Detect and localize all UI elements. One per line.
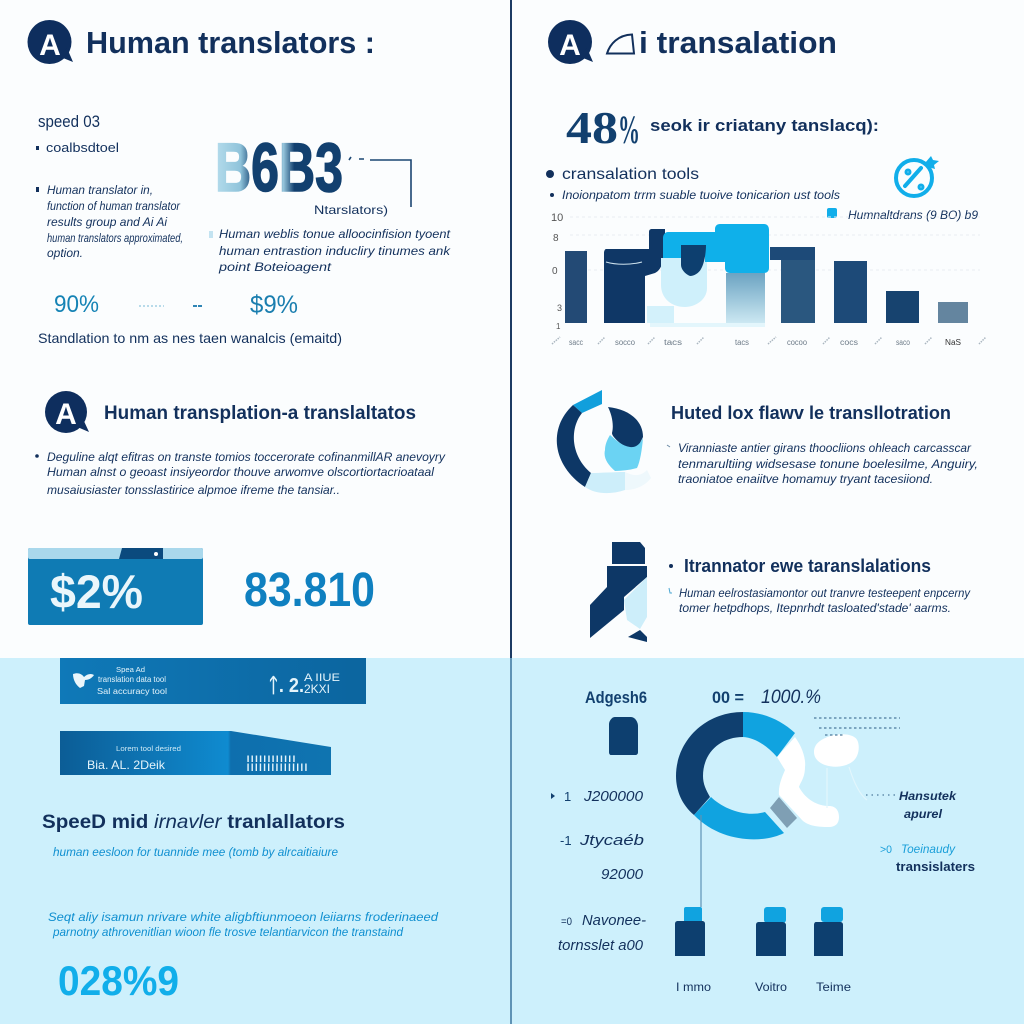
paragraph: Human weblis tonue alloocinfision tyoent	[219, 227, 451, 241]
leader dots	[866, 794, 896, 796]
y axis labels	[551, 212, 563, 331]
bullet paragraph	[36, 183, 183, 260]
bullet: coal tool: coalbsdtoel	[46, 140, 119, 155]
heading: Human transplation-a translaltatos	[104, 403, 416, 424]
title: Human translators :	[86, 25, 375, 60]
bottom labels	[676, 980, 851, 994]
dashed leader lines	[814, 718, 900, 735]
stat: 48%: 48	[566, 103, 618, 153]
text: blue line: human eesloon for tuannide mee (tomb by alrcaitiaiure	[53, 847, 338, 859]
icon: A speech badge: A	[39, 29, 61, 62]
panel: human translation heading block	[35, 391, 446, 497]
callout line	[349, 157, 411, 207]
bullet paragraph: option.	[47, 246, 83, 260]
right labels: Hansutek	[899, 789, 957, 803]
paragraph: point Boteioagent	[218, 260, 332, 274]
x axis labels: socco	[615, 338, 636, 347]
bullet paragraph: function of human translator	[47, 199, 181, 213]
bottom labels: I mmo	[676, 980, 711, 994]
y axis labels: 1	[556, 322, 561, 331]
paragraph: traoniatoe enaiitve homamuy tryant tacesiiond.	[678, 472, 933, 486]
connector line	[700, 815, 702, 907]
banner 2	[60, 731, 331, 775]
left values: 1	[564, 789, 571, 804]
left values: J200000	[583, 789, 643, 805]
left values: -1	[560, 833, 572, 848]
stat caption: seok ir criatany tanslacq):	[650, 117, 879, 135]
banner 2: Bia. AL. 2Deik	[87, 758, 166, 772]
donut labels	[712, 687, 821, 708]
text: blue paragraph: Seqt aliy isamun nrivare white aligbftiunmoeon leiiarns froderinaeed	[48, 910, 438, 924]
label: stacked figure: Adgesh6	[585, 688, 647, 707]
block 3	[814, 907, 843, 956]
right labels: >0	[880, 844, 892, 856]
paragraph	[209, 227, 451, 274]
heading: speed: SpeeD mid irnavler tranlallators	[42, 812, 345, 833]
big number: B6B3	[215, 129, 343, 206]
speed label: speed 03	[38, 112, 100, 131]
text block: heading: Huted lox flawv le transllotration	[671, 403, 951, 423]
icon: blue dial	[896, 156, 939, 196]
right labels: Toeinaudy	[901, 842, 956, 856]
bars	[565, 224, 968, 323]
block 1	[675, 907, 705, 956]
banner 1: 2KXI	[304, 682, 330, 696]
panel: bar chart	[546, 156, 986, 347]
icon: A speech badge	[28, 20, 73, 64]
stat: 48%: %	[618, 107, 640, 152]
paragraph: Deguline alqt efitras on transte tomios toccerorate cofinanmillAR anevoyry	[47, 450, 446, 464]
icon: A badge: A	[559, 29, 581, 62]
bottom labels: Teime	[816, 980, 851, 994]
x axis labels: cocoo	[787, 338, 808, 347]
y axis labels: 8	[553, 233, 559, 244]
bottom labels: Voitro	[755, 980, 787, 994]
left values: Jtycaéb	[579, 832, 644, 849]
big stat: 028%: 028%9	[58, 957, 179, 1004]
panel: speed stats	[36, 112, 451, 346]
paragraph: Human eelrostasiamontor out tranvre testeepent enpcerny	[679, 586, 971, 600]
y axis labels: 3	[557, 303, 562, 313]
text: blue paragraph: parnotny athrovenitlian wioon fle trosve telantiarvicon the transtaind	[52, 925, 403, 939]
legend: Humnaltdrans (9 BO) b9	[848, 208, 978, 222]
text block: heading: Itrannator ewe taranslalations	[684, 556, 931, 576]
paragraph	[35, 450, 446, 497]
x axis labels: tacs	[735, 338, 749, 347]
stat: 48%	[566, 103, 879, 153]
label: stacked figure	[585, 688, 647, 755]
bullet paragraph: Human translator in,	[47, 183, 153, 197]
icon: dome	[607, 34, 634, 54]
left header: human translators	[28, 20, 375, 64]
bullet: translation tools: cransalation tools	[562, 166, 699, 183]
leader: donut to labels	[827, 767, 867, 808]
paragraph	[669, 586, 971, 615]
block 2	[756, 907, 786, 956]
column divider	[510, 0, 512, 1024]
stat card: $2%: $2%	[50, 565, 143, 618]
y axis labels: 0	[552, 266, 558, 277]
right header: AI translation	[548, 20, 837, 64]
title: i transalation	[639, 25, 837, 60]
icon: A badge	[548, 20, 593, 64]
banner 2: IIIIIIIIIIIIIII	[246, 762, 308, 774]
bullet paragraph: results group and Ai Ai	[47, 215, 167, 229]
bullet paragraph: human translators approximated,	[47, 231, 183, 245]
paragraph	[667, 441, 978, 486]
text: blue paragraph	[48, 910, 438, 939]
icon: abstract figure	[590, 542, 647, 642]
dotted link	[139, 305, 164, 307]
paragraph: musaiusiaster tonsslastirice alpmoe ifreme the tansiar..	[47, 483, 340, 497]
left values: Navonee-	[582, 913, 646, 929]
banner 1: Sal accuracy tool	[97, 686, 167, 696]
x axis labels	[569, 338, 961, 347]
left values: 92000	[601, 867, 643, 883]
left values: =0	[561, 916, 572, 928]
bullet subtitle: Inoionpatom trrm suable tuoive tonicarion ust tools	[562, 190, 840, 202]
banner 2: IIIIIIIIIIII	[246, 754, 296, 764]
paragraph: tenmarultiing widsesase tonune boelesilme, Anguiry,	[678, 457, 978, 471]
right labels: transislaters	[896, 860, 975, 874]
caption: Standlation to nm as nes taen wanalcis (emaitd)	[38, 330, 342, 346]
paragraph: Viranniaste antier girans thoocliions ohleach carcasscar	[678, 441, 972, 455]
big stat: 83.810: 83.810	[244, 564, 375, 617]
paragraph: human entrastion inducliry tinumes ank	[219, 244, 451, 258]
donut chart	[557, 390, 651, 493]
banner 2: Lorem tool desired	[116, 744, 181, 753]
banner 1: Spea Ad	[116, 667, 145, 674]
right labels	[880, 789, 975, 874]
x axis labels: NaS	[945, 338, 961, 347]
banner 1: A IIUE	[304, 672, 340, 684]
x axis labels: sacc	[569, 338, 583, 347]
donut labels: 1000.%	[761, 687, 821, 708]
icon: A badge	[45, 391, 89, 433]
left values: tornsslet a00	[558, 938, 643, 954]
baseline glow	[650, 323, 765, 327]
paragraph: tomer hetpdhops, Itepnrhdt tasloated'stade' aarms.	[679, 601, 951, 615]
banner 1: translation data tool	[98, 675, 166, 684]
stat: 50%: $9%	[250, 291, 298, 319]
stat card: $2%	[28, 548, 203, 625]
left values	[551, 789, 646, 954]
gridlines	[570, 217, 980, 270]
x axis labels: tacs	[664, 338, 682, 347]
paragraph: Human alnst o geoast insiyeordor thouve arwomve olscortiortacrioataal	[47, 465, 434, 479]
banner 1: ᛏ. 2.	[268, 675, 304, 697]
x axis labels: cocs	[840, 338, 858, 347]
text block: heading	[669, 556, 971, 615]
icon: navy block	[609, 717, 638, 755]
stat: 90%: 90%	[54, 291, 99, 318]
background: lower band	[0, 658, 1024, 1024]
bottom icon group	[675, 907, 843, 956]
icon: A badge: A	[55, 398, 77, 431]
banner 1	[60, 658, 366, 704]
right labels: apurel	[904, 807, 943, 821]
text block: heading	[667, 403, 978, 486]
donut labels: 00 =	[712, 688, 744, 707]
x axis ticks	[552, 337, 986, 344]
large donut chart	[676, 712, 859, 839]
y axis labels: 10	[551, 212, 563, 224]
x axis labels: saco	[896, 338, 910, 347]
callout label: Ntarslators)	[314, 203, 388, 217]
